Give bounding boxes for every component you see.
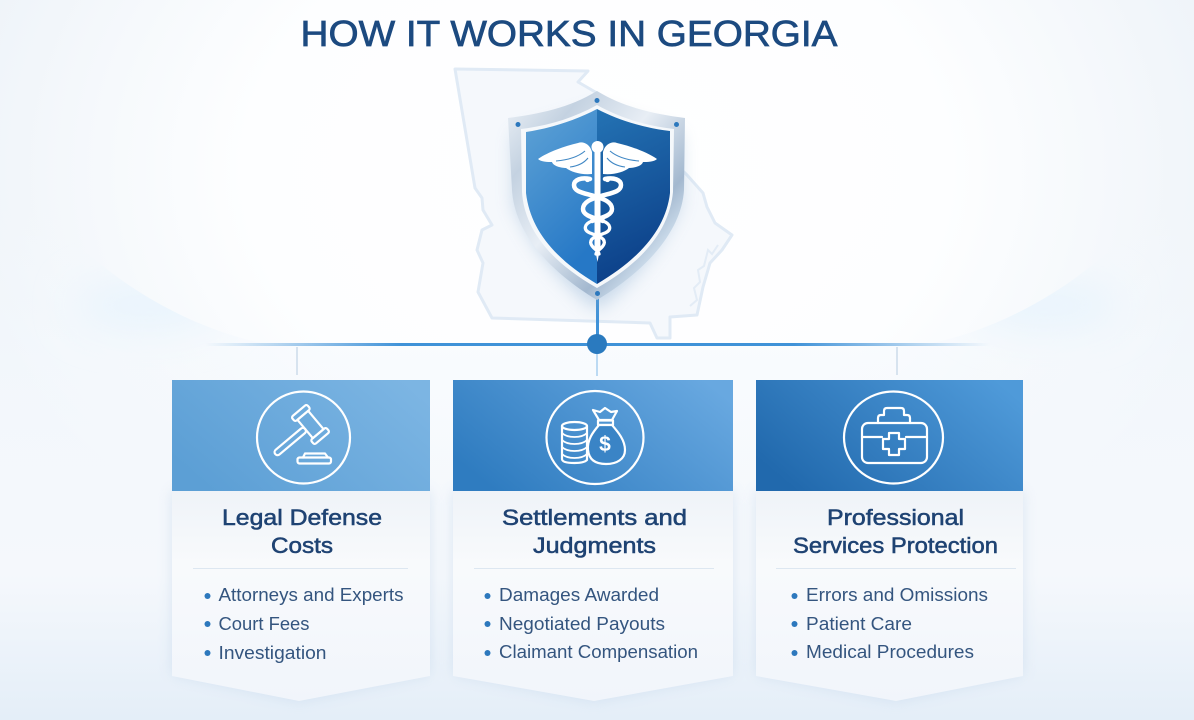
icon: gavel xyxy=(257,392,350,484)
panel: settlements and judgments: Judgments xyxy=(533,533,656,558)
list: Errors and Omissions xyxy=(806,585,988,605)
panel: legal defense costs: Costs xyxy=(271,533,333,558)
icon: medical kit xyxy=(844,392,943,484)
list: Court Fees xyxy=(218,614,310,634)
heading: Legal Defense xyxy=(222,505,382,530)
panel: settlements and judgments xyxy=(453,380,733,701)
list xyxy=(792,585,988,662)
list: Medical Procedures xyxy=(806,642,974,662)
panel: legal defense costs xyxy=(172,380,430,701)
list: Claimant Compensation xyxy=(499,642,698,662)
list xyxy=(484,585,698,662)
icon: medical shield xyxy=(508,91,685,310)
icon: coins and money bag xyxy=(546,391,644,484)
connector: horizontal timeline with node xyxy=(205,296,990,376)
list: Negotiated Payouts xyxy=(499,614,665,634)
list: Investigation xyxy=(218,643,326,663)
title: HOW IT WORKS IN GEORGIA xyxy=(300,13,838,54)
panel: professional services protection: Services Protection xyxy=(793,533,998,558)
list: Damages Awarded xyxy=(499,585,659,605)
heading: Settlements and xyxy=(502,505,687,530)
dollar sign: $ xyxy=(599,433,611,456)
icon: caduceus xyxy=(538,141,657,262)
list xyxy=(204,585,404,663)
map: Georgia state outline xyxy=(455,69,732,338)
heading: Professional xyxy=(827,505,964,530)
list: Attorneys and Experts xyxy=(218,585,404,605)
panel: professional services protection xyxy=(756,380,1023,701)
list: Patient Care xyxy=(806,614,912,634)
